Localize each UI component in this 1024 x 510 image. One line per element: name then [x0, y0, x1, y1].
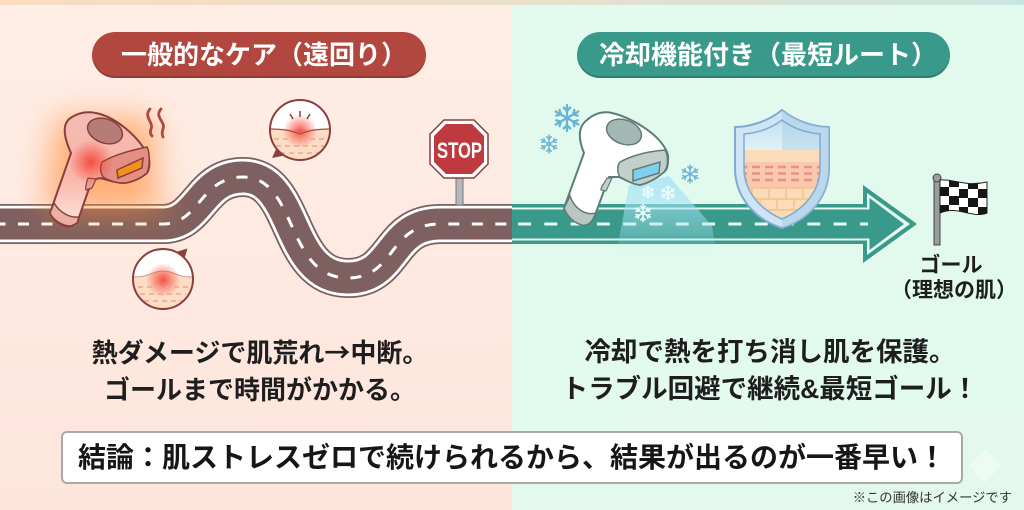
- conclusion box: 結論：肌ストレスゼロで続けられるから、結果が出るのが一番早い！: [78, 442, 946, 473]
- icon: stop sign: STOP: [437, 138, 482, 163]
- icon: cooling beam: [617, 176, 716, 250]
- goal label: （理想の肌）: [891, 279, 1017, 302]
- text block: left description: ゴールまで時間がかかる。: [104, 374, 416, 404]
- icon: heat waves: [148, 109, 163, 137]
- road: winding route: [0, 177, 512, 278]
- icon: cooling epilator: [564, 112, 668, 225]
- icon: snowflakes: [541, 105, 698, 222]
- text block: left description: [92, 333, 428, 404]
- icon: stop sign: [430, 120, 488, 205]
- text block: right description: 冷却で熱を打ち消し肌を保護。: [584, 337, 956, 367]
- text block: left description: 熱ダメージで肌荒れ→中断。: [92, 333, 428, 370]
- top gradient strip: [0, 0, 1024, 5]
- text block: right description: トラブル回避で継続&最短ゴール！: [562, 374, 978, 404]
- text block: right description: [562, 337, 978, 404]
- heading: cooling feature: 冷却機能付き（最短ルート）: [599, 40, 937, 70]
- panel: left background: [0, 0, 512, 510]
- icon: skin shield: [735, 110, 829, 230]
- icon: checkered goal flag: [933, 174, 987, 245]
- footnote: ※この画像はイメージです: [853, 490, 1012, 505]
- callout: irritated skin lower: [133, 248, 193, 312]
- icon: overheated epilator: [45, 112, 170, 226]
- heading: general care: [92, 32, 426, 78]
- panel: right background: [512, 0, 1024, 510]
- goal label: [891, 254, 1017, 302]
- road: straight arrow route: [512, 185, 917, 263]
- illustration layer: [0, 94, 1000, 482]
- goal label: ゴール: [920, 254, 982, 277]
- heading: general care: 一般的なケア（遠回り）: [121, 40, 407, 70]
- heading: cooling feature: [577, 32, 950, 78]
- callout: irritated skin upper: [268, 100, 332, 162]
- sparkle: [969, 449, 1001, 483]
- conclusion box: [61, 431, 963, 484]
